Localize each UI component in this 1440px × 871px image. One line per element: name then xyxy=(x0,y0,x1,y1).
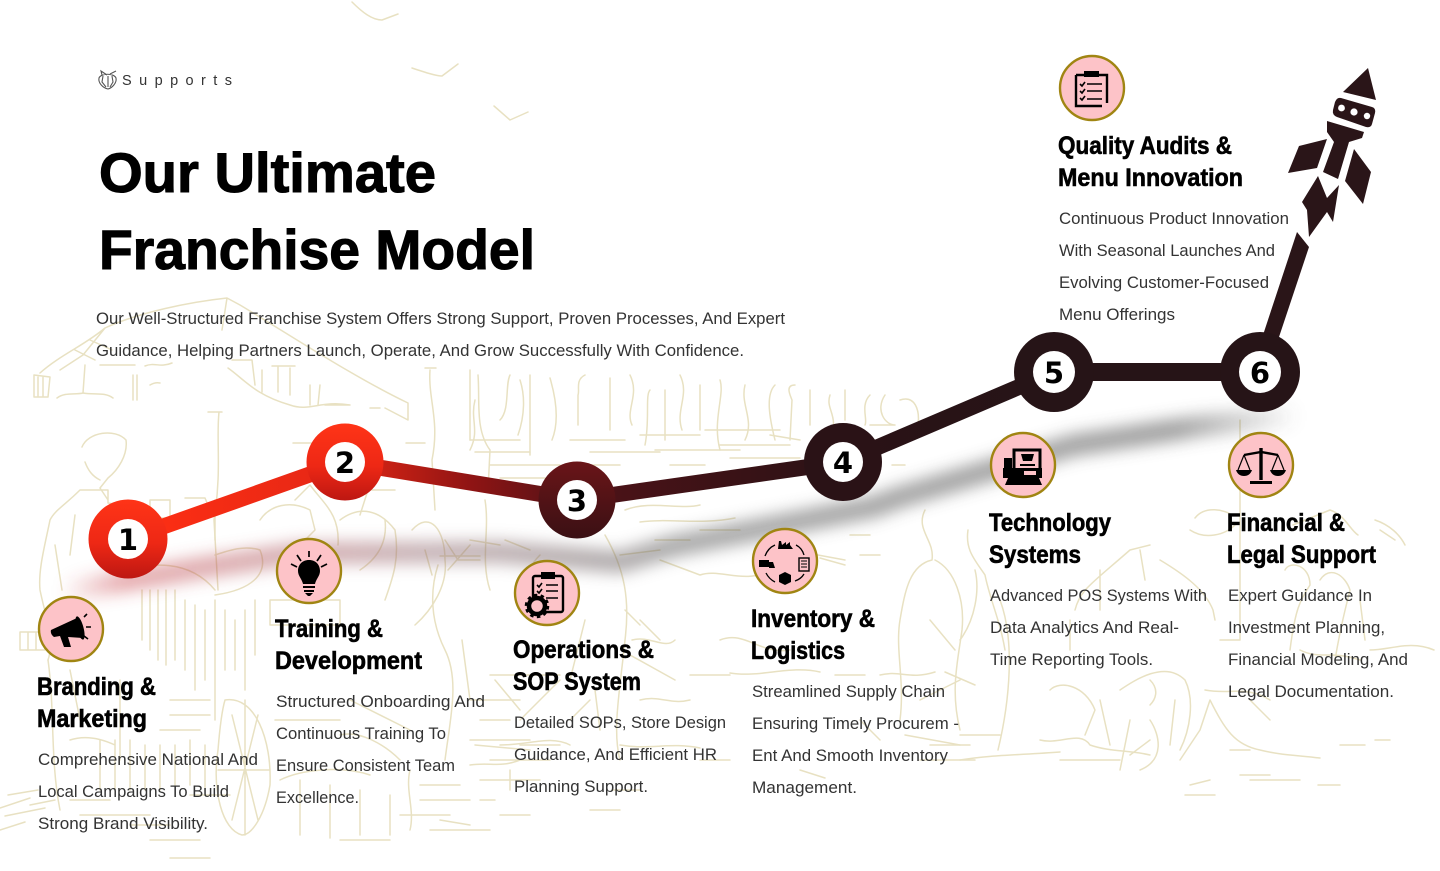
panel: financial and legal support: Financial Modeling, And xyxy=(1228,650,1408,669)
panel: branding and marketing: Comprehensive National And xyxy=(38,750,258,769)
panel: technology systems xyxy=(989,433,1207,669)
panel: inventory and logistics: Management. xyxy=(752,778,857,797)
panel: technology systems: Advanced POS Systems With xyxy=(990,586,1207,605)
panel: quality audits and menu innovation: Menu Innovation xyxy=(1058,164,1243,192)
panel: operations and SOP system: Detailed SOPs, Store Design xyxy=(514,713,726,732)
node 6: 6 xyxy=(1250,356,1270,390)
intro paragraph xyxy=(96,309,785,360)
title: Our Ultimate xyxy=(99,141,436,204)
panel: inventory and logistics: Ensuring Timely Procurem - xyxy=(752,714,959,733)
icon: megaphone xyxy=(39,597,103,661)
panel: financial and legal support: Investment Planning, xyxy=(1228,618,1385,637)
panel: technology systems: Technology xyxy=(989,509,1111,537)
panel: operations and SOP system: Guidance, And Efficient HR xyxy=(514,745,717,764)
node 2: 2 xyxy=(335,446,355,480)
growth path connecting the six steps xyxy=(88,232,1309,578)
panel: training and development: Continuous Training To xyxy=(276,724,446,743)
panel: inventory and logistics: Streamlined Supply Chain xyxy=(752,682,945,701)
panel: branding and marketing: Marketing xyxy=(37,705,147,733)
panel: branding and marketing xyxy=(37,597,258,833)
panel: training and development: Training & xyxy=(275,615,383,643)
intro paragraph: Guidance, Helping Partners Launch, Operate, And Grow Successfully With Confidence. xyxy=(96,341,744,360)
panel: inventory and logistics: Inventory & xyxy=(751,605,875,633)
title: Franchise Model xyxy=(99,218,535,281)
panel: financial and legal support: Financial & xyxy=(1227,509,1345,537)
panel: inventory and logistics: Logistics xyxy=(751,637,845,665)
panel: inventory and logistics: Ent And Smooth Inventory xyxy=(752,746,948,765)
panel: financial and legal support: Legal Documentation. xyxy=(1228,682,1394,701)
panel: branding and marketing: Local Campaigns To Build xyxy=(38,782,229,801)
icon: balance scales xyxy=(1229,433,1293,497)
node 3: 3 xyxy=(567,484,587,518)
icon: rocket xyxy=(1288,68,1376,237)
panel: training and development: Ensure Consistent Team xyxy=(276,756,455,775)
panel: branding and marketing: Branding & xyxy=(37,673,156,701)
icon: light bulb xyxy=(277,539,341,603)
panel: operations and SOP system xyxy=(513,561,726,796)
node 1: 1 xyxy=(118,523,138,557)
node 6 xyxy=(1220,332,1300,412)
node 3 xyxy=(538,462,616,538)
panel: quality audits and menu innovation: With Seasonal Launches And xyxy=(1059,241,1275,260)
node 1 xyxy=(88,500,168,578)
icon: POS terminal xyxy=(991,433,1055,497)
panel: technology systems: Time Reporting Tools. xyxy=(990,650,1153,669)
icon: coconut logo xyxy=(99,71,116,89)
node 5 xyxy=(1014,332,1094,412)
icon: clipboard with gear xyxy=(515,561,579,625)
panel: inventory and logistics xyxy=(751,529,959,797)
node 4 xyxy=(804,423,882,501)
panel: quality audits and menu innovation: Menu Offerings xyxy=(1059,305,1175,324)
panel: training and development: Excellence. xyxy=(276,788,359,807)
panel: financial and legal support: Expert Guidance In xyxy=(1228,586,1372,605)
panel: quality audits and menu innovation: Continuous Product Innovation xyxy=(1059,209,1289,228)
rocket exhaust stem xyxy=(1263,232,1309,337)
panel: technology systems: Systems xyxy=(989,541,1081,569)
panel: operations and SOP system: Planning Support. xyxy=(514,777,648,796)
panel: operations and SOP system: SOP System xyxy=(513,668,641,696)
icon: checklist clipboard xyxy=(1060,56,1124,120)
soft shadow under the growth path xyxy=(60,415,1300,592)
panel: operations and SOP system: Operations & xyxy=(513,636,654,664)
icon: supply chain cycle xyxy=(753,529,817,593)
node 2 xyxy=(306,424,384,500)
panel: training and development xyxy=(275,539,485,807)
panel: quality audits and menu innovation: Evolving Customer-Focused xyxy=(1059,273,1269,292)
panel: quality audits and menu innovation xyxy=(1058,56,1289,324)
panel: technology systems: Data Analytics And Real- xyxy=(990,618,1179,637)
panel: branding and marketing: Strong Brand Visibility. xyxy=(38,814,208,833)
node 5: 5 xyxy=(1044,356,1064,390)
title xyxy=(99,141,535,281)
panel: training and development: Structured Onboarding And xyxy=(276,692,485,711)
panel: training and development: Development xyxy=(275,647,423,675)
panel: financial and legal support: Legal Support xyxy=(1227,541,1377,569)
panel: quality audits and menu innovation: Quality Audits & xyxy=(1058,132,1232,160)
panel: financial and legal support xyxy=(1227,433,1408,701)
brand mark and section label: Supports xyxy=(122,73,232,89)
node 4: 4 xyxy=(833,446,853,480)
intro paragraph: Our Well-Structured Franchise System Offers Strong Support, Proven Processes, And Expert xyxy=(96,309,785,328)
